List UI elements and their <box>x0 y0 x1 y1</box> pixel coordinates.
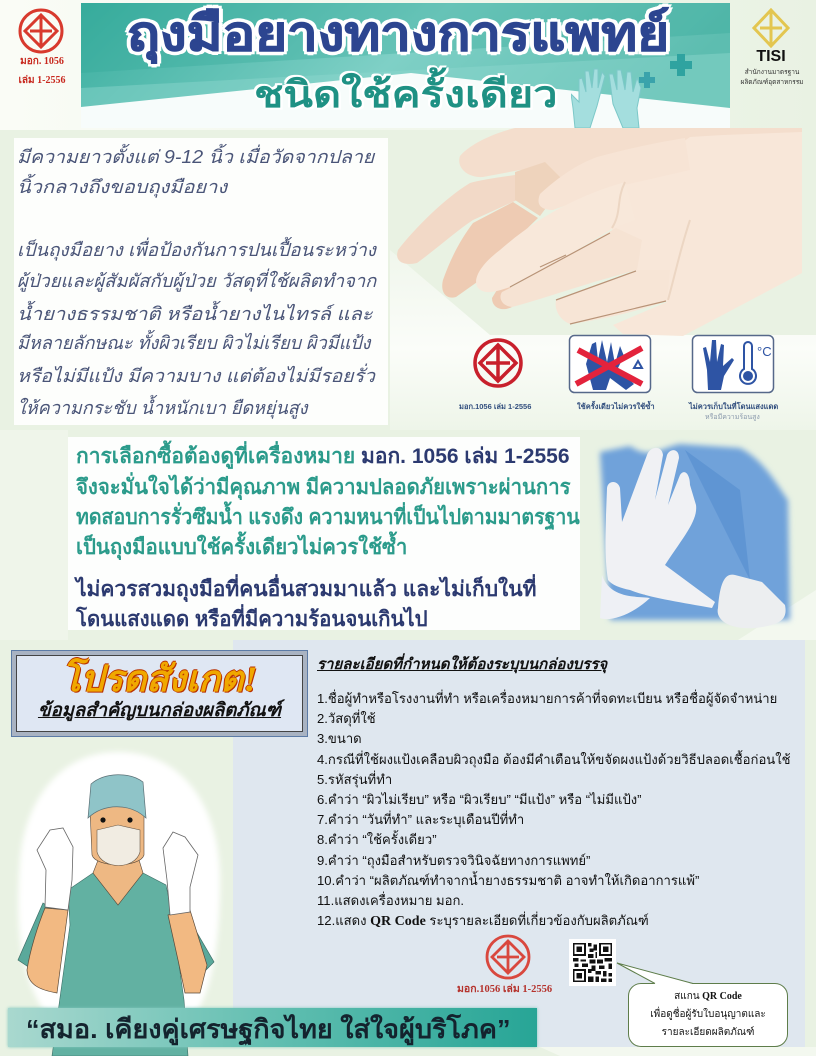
subtitle: ชนิดใช้ครั้งเดียว <box>254 74 558 115</box>
TISI caption <box>740 68 803 86</box>
caption: storage line 2: หรือมีความร้อนสูง <box>705 414 760 421</box>
icon row <box>459 334 778 421</box>
advice line 4: เป็นถุงมือแบบใช้ครั้งเดียวไม่ควรใช้ซ้ำ <box>76 536 407 559</box>
logo caption bottom: มอก.1056 เล่ม 1-2556 <box>457 984 552 995</box>
icon: TIS mark <box>473 338 523 388</box>
description paragraph <box>17 236 377 419</box>
icon captions: มอก.1056 เล่ม 1-2556 <box>459 402 531 411</box>
slogan bar <box>8 1008 537 1047</box>
callout text <box>650 991 766 1038</box>
logo text: เล่ม 1-2556 <box>19 75 65 86</box>
panel: buying advice <box>68 437 580 630</box>
callout text: สแกน QR Code <box>674 991 742 1002</box>
caption: storage: ไม่ควรเก็บในที่โดนแสงแดด <box>689 402 778 411</box>
slogan text: “สมอ. เคียงคู่เศรษฐกิจไทย ใส่ใจผู้บริโภค” <box>26 1014 510 1044</box>
header banner <box>81 3 730 128</box>
packaging list: 10.คำว่า “ผลิตภัณฑ์ทำจากน้ำยางธรรมชาติ อาจทำให้เกิดอาการแพ้” <box>317 873 699 888</box>
packaging heading: รายละเอียดที่กำหนดให้ต้องระบุบนกล่องบรรจุ <box>317 657 607 673</box>
packaging list: 3.ขนาด <box>317 731 362 746</box>
advice line 2: จึงจะมั่นใจได้ว่ามีคุณภาพ มีความปลอดภัยเพราะผ่านการ <box>76 476 571 499</box>
advice line 1: การเลือกซื้อต้องดูที่เครื่องหมาย มอก. 1056 เล่ม 1-2556 <box>76 445 570 468</box>
logo: TIS mark bottom <box>486 934 530 980</box>
packaging list: 6.คำว่า “ผิวไม่เรียบ” หรือ “ผิวเรียบ” “มีแป้ง” หรือ “ไม่มีแป้ง” <box>317 792 642 807</box>
packaging list: 9.คำว่า “ถุงมือสำหรับตรวจวินิจฉัยทางการแพทย์” <box>317 853 590 868</box>
logo: TISI <box>752 8 790 48</box>
packaging list: 4.กรณีที่ใช้ผงแป้งเคลือบผิวถุงมือ ต้องมีคำเตือนให้ขจัดผงแป้งด้วยวิธีปลอดเชื้อก่อนใช้ <box>317 752 791 767</box>
panel: packaging details <box>233 640 805 1047</box>
TISI caption: สำนักงานมาตรฐาน <box>745 69 799 76</box>
paragraph line 2: ผู้ป่วยและผู้สัมผัสกับผู้ป่วย วัสดุที่ใช้ผลิตทำจาก <box>17 271 376 291</box>
caption: single use: ใช้ครั้งเดียวไม่ควรใช้ซ้ำ <box>577 402 655 411</box>
icon: keep from heat <box>692 334 774 394</box>
paragraph line 5: หรือไม่มีแป้ง มีความบาง แต่ต้องไม่มีรอยรั่ว <box>17 366 375 386</box>
paragraph line 3: น้ำยางธรรมชาติ หรือน้ำยางไนไทรล์ และ <box>17 304 373 324</box>
icon: single use <box>568 334 652 394</box>
attention subheading: ข้อมูลสำคัญบนกล่องผลิตภัณฑ์ <box>38 701 281 721</box>
title: ถุงมือยางทางการแพทย์ <box>127 8 669 61</box>
packaging list: 5.รหัสรุ่นที่ทำ <box>317 772 392 787</box>
description line 1: มีความยาวตั้งแต่ 9-12 นิ้ว เมื่อวัดจากปลาย <box>17 147 374 167</box>
packaging list: 1.ชื่อผู้ทำหรือโรงงานที่ทำ หรือเครื่องหมายการค้าที่จดทะเบียน หรือชื่อผู้จัดจำหน่าย <box>317 691 777 706</box>
illustration: surgeon <box>17 750 222 1056</box>
callout: scan QR code <box>616 962 788 1047</box>
photo: person putting on glove <box>596 440 794 628</box>
QR code <box>569 939 616 986</box>
callout text: เพื่อดูชื่อผู้รับใบอนุญาตและ <box>650 1009 766 1020</box>
icon: gloves and plus signs <box>571 54 692 128</box>
description line 2: นิ้วกลางถึงขอบถุงมือยาง <box>17 177 227 197</box>
callout bubble <box>628 983 788 1047</box>
paragraph line 4: มีหลายลักษณะ ทั้งผิวเรียบ ผิวไม่เรียบ ผิวมีแป้ง <box>17 333 370 353</box>
packaging list: 7.คำว่า “วันที่ทำ” และระบุเดือนปีที่ทำ <box>317 812 524 827</box>
packaging list: 8.คำว่า “ใช้ครั้งเดียว” <box>317 832 437 847</box>
logo text: มอก. 1056 <box>20 56 64 67</box>
callout: attention box <box>11 650 308 737</box>
attention heading: โปรดสังเกต! <box>62 659 257 699</box>
TISI caption: ผลิตภัณฑ์อุตสาหกรรม <box>741 79 803 86</box>
packaging list: 11.แสดงเครื่องหมาย มอก. <box>317 893 464 908</box>
packaging list <box>317 690 791 929</box>
packaging list: 12.แสดง QR Code ระบุรายละเอียดที่เกี่ยวข้องกับผลิตภัณฑ์ <box>317 913 649 929</box>
TISI text: TISI <box>756 48 786 65</box>
paragraph line 6: ให้ความกระชับ น้ำหนักเบา ยืดหยุ่นสูง <box>17 398 308 418</box>
advice line 3: ทดสอบการรั่วซึมน้ำ แรงดึง ความหนาที่เป็นไปตามมาตรฐาน <box>76 506 580 529</box>
logo: TIS red mark <box>18 8 64 54</box>
logo text <box>19 56 66 86</box>
panel: description text <box>14 138 388 425</box>
packaging list: 2.วัสดุที่ใช้ <box>317 711 376 726</box>
paragraph line 1: เป็นถุงมือยาง เพื่อป้องกันการปนเปื้อนระหว่าง <box>17 240 376 260</box>
icon: keep from heat: °C <box>757 344 772 359</box>
warning line 1: ไม่ควรสวมถุงมือที่คนอื่นสวมมาแล้ว และไม่เก็บในที่ <box>76 578 536 601</box>
photo: gloved hands <box>397 128 802 336</box>
callout text: รายละเอียดผลิตภัณฑ์ <box>662 1027 754 1038</box>
callout pointer <box>616 962 693 984</box>
